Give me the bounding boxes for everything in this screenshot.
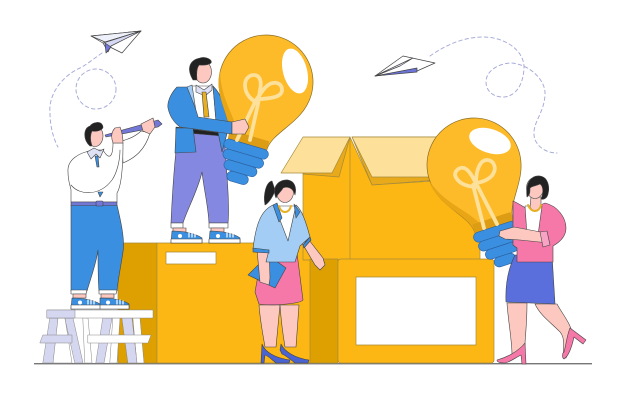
big light bulb left: [191, 24, 324, 196]
shadow side: [202, 71, 256, 141]
filament: [237, 75, 282, 140]
trousers: [71, 205, 124, 291]
hair: [527, 176, 549, 199]
hair: [264, 180, 296, 205]
filament: [455, 160, 497, 228]
collar: [196, 84, 212, 96]
collar: [273, 203, 300, 222]
belt: [71, 202, 117, 206]
small box left: [118, 243, 311, 363]
head: [276, 182, 294, 202]
lower box side: [310, 259, 338, 363]
man holding bulb: [171, 84, 240, 243]
arm of man holding bulb: [168, 87, 249, 134]
shadow side: [430, 170, 485, 241]
bulb glass: [202, 24, 324, 158]
hair: [85, 122, 103, 146]
telescope pen: [105, 120, 162, 137]
paper plane right: [375, 56, 435, 76]
back leg: [535, 304, 573, 358]
necklace: [279, 206, 291, 212]
man with telescope: [68, 118, 162, 309]
top: [276, 206, 298, 243]
small box label: [166, 252, 216, 264]
skirt: [506, 255, 555, 304]
ground line: [34, 363, 592, 364]
belt: [176, 127, 222, 136]
tie: [202, 92, 209, 117]
neck: [530, 197, 541, 211]
jacket: [513, 201, 566, 262]
shoes: [71, 298, 100, 309]
hands: [112, 127, 123, 143]
shirt: [68, 143, 123, 202]
box flap right: [352, 137, 437, 177]
large box with open flaps: [281, 137, 494, 363]
shirt: [190, 86, 216, 120]
highlight: [277, 46, 313, 96]
raised arm behind: [122, 131, 150, 163]
big light bulb right: [415, 106, 551, 279]
dashed flight path right: [430, 37, 557, 153]
legs: [259, 305, 280, 347]
head: [526, 178, 544, 198]
lapel: [187, 85, 197, 118]
head man holding bulb: [189, 57, 212, 83]
tablet: [248, 255, 286, 288]
skirt: [255, 253, 303, 305]
heels: [261, 344, 290, 363]
base band: [228, 130, 269, 150]
dashed flight path left: [50, 53, 116, 147]
shoes: [171, 231, 202, 243]
lower box front: [338, 259, 494, 363]
trousers: [171, 133, 229, 223]
highlight: [466, 123, 514, 159]
jacket: [175, 128, 196, 153]
front leg: [507, 303, 527, 355]
bulb glass: [415, 106, 539, 241]
cuffs: [253, 237, 311, 253]
screw base: [214, 138, 270, 189]
lower box label: [356, 277, 476, 345]
stool: [40, 310, 153, 363]
jacket: [253, 205, 310, 262]
head: [87, 126, 103, 146]
upper box body: [303, 137, 480, 260]
screw base: [472, 220, 528, 272]
woman holding bulb: [497, 176, 586, 364]
base band: [472, 212, 513, 233]
hand on tablet: [257, 250, 270, 285]
collar and tie: [95, 156, 99, 167]
woman with tablet: [248, 180, 325, 363]
arm: [499, 227, 549, 243]
forearm: [302, 240, 325, 270]
top: [525, 206, 542, 235]
box flap left: [281, 137, 350, 173]
sleeve cuff: [540, 231, 550, 247]
pink heels: [497, 343, 526, 364]
paper plane left: [91, 31, 141, 53]
necklace: [528, 205, 541, 211]
